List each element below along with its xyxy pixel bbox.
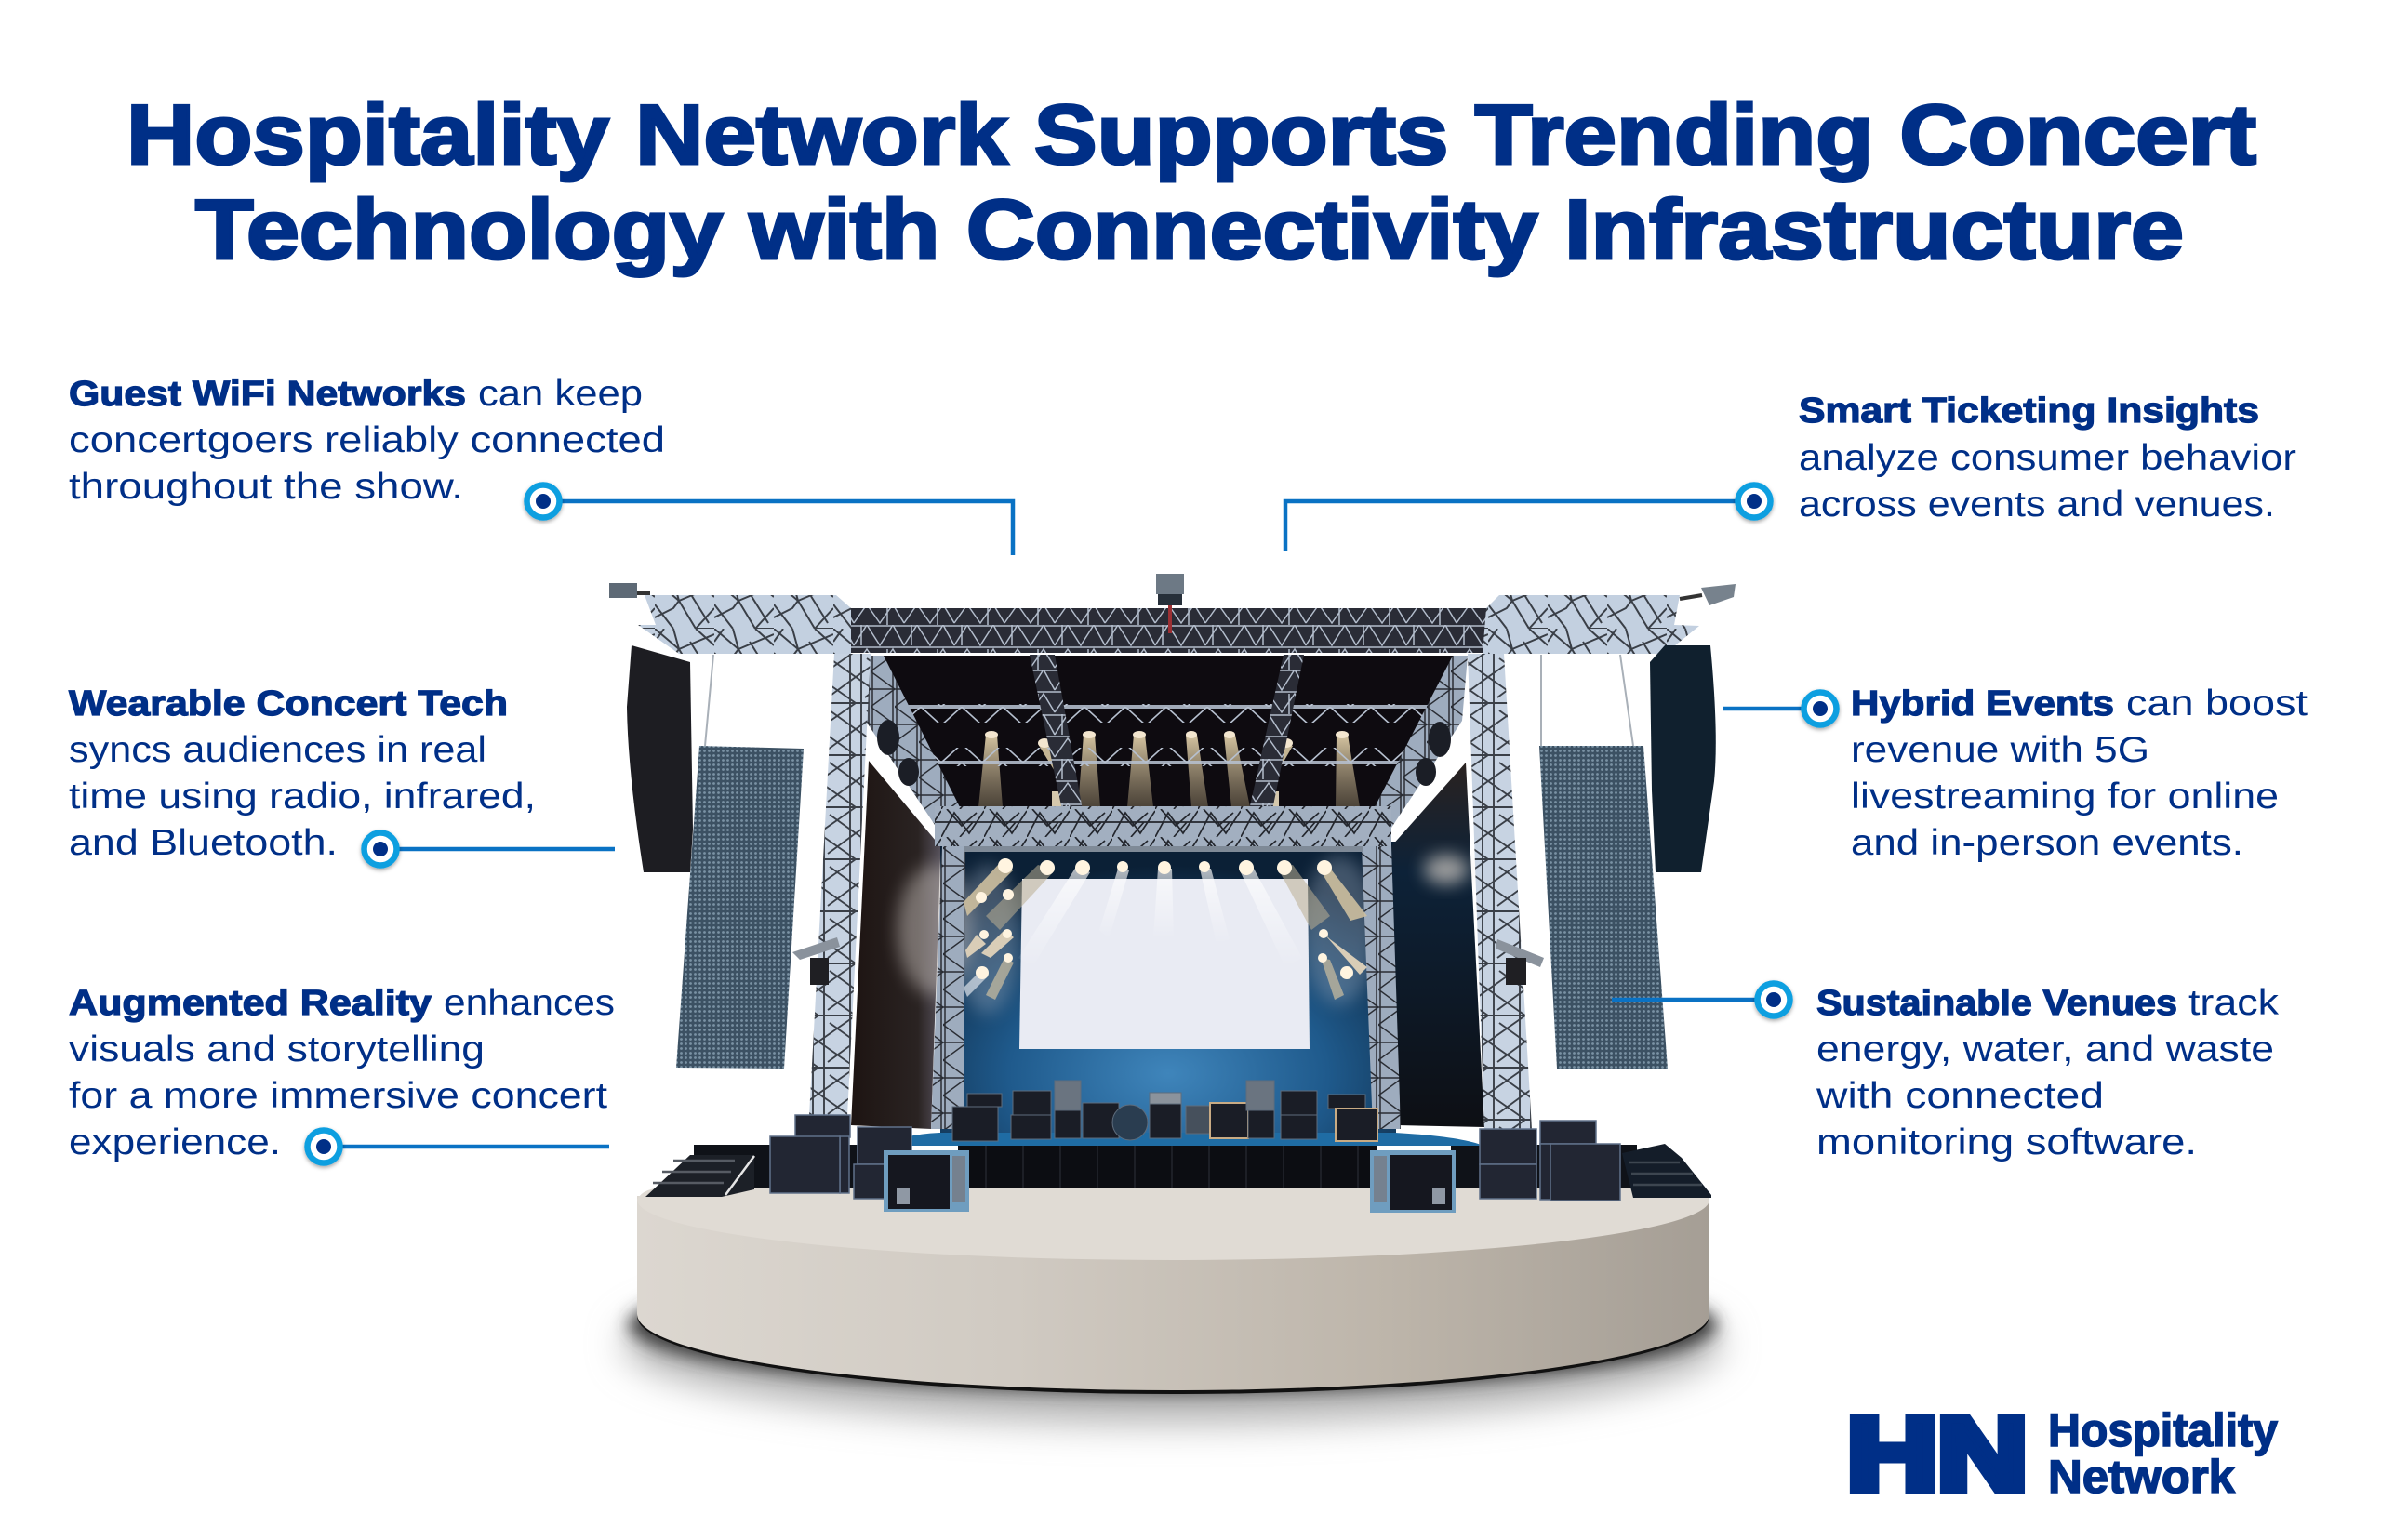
left stage monitor — [884, 1150, 969, 1212]
callout: Hybrid Events: Hybrid Events — [1851, 684, 2114, 724]
right side wall — [1391, 763, 1484, 1127]
lamp bar — [964, 846, 1363, 852]
back line amps — [952, 1081, 1377, 1141]
title: Hospitality Network Supports Trending Concert — [126, 88, 2256, 182]
connector: Wearable Concert Tech — [365, 833, 615, 865]
logo: Hospitality Network: HN — [1847, 1397, 2028, 1511]
callout: Wearable Concert Tech — [69, 684, 536, 863]
left line-array speaker — [627, 645, 693, 872]
glare on right wall — [1424, 855, 1469, 884]
main top truss — [848, 608, 1486, 653]
callout: Augmented Reality: for a more immersive concert — [69, 1076, 607, 1116]
logo: Hospitality Network — [1847, 1397, 2278, 1511]
stage base shadow — [624, 1258, 1722, 1423]
projection screen — [1019, 879, 1310, 1049]
title: Technology with Connectivity Infrastructure — [195, 183, 2184, 277]
logo: Hospitality Network: Network — [2048, 1451, 2235, 1503]
connector: Guest WiFi Networks — [526, 485, 1013, 555]
right upper truss — [1483, 595, 1699, 654]
callout: Augmented Reality: visuals and storytelling — [69, 1029, 485, 1069]
inner truss — [935, 806, 1391, 846]
callout: Hybrid Events: can boost — [2126, 684, 2308, 724]
side spot fixtures — [877, 720, 1451, 786]
hanging wires — [705, 655, 1633, 746]
callout: Wearable Concert Tech: and Bluetooth. — [69, 823, 338, 863]
beam lamps — [985, 731, 1349, 748]
callout: Wearable Concert Tech: time using radio, infrared, — [69, 777, 536, 816]
floodlights — [609, 574, 1736, 633]
callout: Sustainable Venues: with connected — [1816, 1076, 2104, 1116]
right line-array speaker — [1650, 645, 1716, 872]
callout: Augmented Reality — [69, 983, 615, 1162]
right LED panel — [1539, 746, 1668, 1069]
callout: Guest WiFi Networks: Guest WiFi Networks — [69, 375, 466, 414]
right speaker stacks — [1480, 1121, 1620, 1201]
right stage monitor — [1370, 1150, 1456, 1213]
callout: Wearable Concert Tech: syncs audiences in real — [69, 730, 486, 770]
callout: Guest WiFi Networks — [69, 374, 665, 507]
callout: Guest WiFi Networks: concertgoers reliably connected — [69, 420, 665, 460]
callout: Smart Ticketing Insights: Smart Ticketing Insights — [1799, 392, 2259, 431]
callout: Hybrid Events: and in-person events. — [1851, 823, 2243, 863]
logo: Hospitality Network: Hospitality — [2048, 1404, 2278, 1456]
callout: Smart Ticketing Insights — [1799, 392, 2296, 524]
circular stage base top — [637, 1188, 1709, 1260]
left speaker stacks — [770, 1115, 911, 1199]
stage curtain — [958, 1146, 1377, 1191]
callout: Sustainable Venues: track — [2188, 983, 2280, 1023]
connector: Sustainable Venues — [1612, 984, 1789, 1016]
callout: Augmented Reality: enhances — [444, 983, 615, 1023]
side stage platforms — [694, 1145, 1637, 1191]
callout: Smart Ticketing Insights: analyze consumer behavior — [1799, 438, 2296, 478]
haze beside screen — [898, 856, 1377, 1014]
callout: Augmented Reality: Augmented Reality — [69, 984, 432, 1023]
callout: Guest WiFi Networks: can keep — [478, 374, 643, 414]
callout: Hybrid Events — [1851, 684, 2308, 863]
diagonal side trusses — [867, 656, 1468, 833]
lower stage lights — [964, 858, 1367, 1000]
ceiling — [871, 656, 1466, 809]
callout: Wearable Concert Tech: Wearable Concert Tech — [69, 684, 508, 724]
upper stage light beams — [978, 735, 1360, 815]
ceiling cross trusses — [882, 704, 1462, 766]
back wall with glow — [940, 842, 1396, 1139]
callout: Sustainable Venues: monitoring software. — [1816, 1122, 2197, 1162]
left column camera — [792, 937, 840, 985]
left stairs — [645, 1155, 754, 1197]
callout: Sustainable Venues: Sustainable Venues — [1816, 984, 2177, 1023]
callout: Hybrid Events: revenue with 5G — [1851, 730, 2149, 770]
right column camera — [1496, 939, 1544, 985]
callout: Hybrid Events: livestreaming for online — [1851, 777, 2279, 816]
left main column — [809, 654, 871, 1116]
connector: Augmented Reality — [307, 1131, 609, 1162]
connector: Smart Ticketing Insights — [1285, 485, 1771, 551]
callout: Guest WiFi Networks: throughout the show. — [69, 467, 463, 507]
callout: Augmented Reality: experience. — [69, 1122, 281, 1162]
left side wall — [851, 761, 940, 1129]
callout: Sustainable Venues — [1816, 983, 2280, 1162]
right main column — [1468, 654, 1532, 1129]
callout: Sustainable Venues: energy, water, and waste — [1816, 1029, 2274, 1069]
left LED panel — [676, 746, 804, 1069]
vertical drop trusses — [1030, 655, 1304, 810]
title — [126, 88, 2256, 277]
right stairs — [1622, 1144, 1711, 1198]
circular stage base side — [637, 1198, 1709, 1394]
inner columns — [931, 846, 1401, 1129]
stage floor — [884, 1133, 1483, 1146]
connector: Hybrid Events — [1723, 692, 1836, 725]
callout: Smart Ticketing Insights: across events and venues. — [1799, 485, 2275, 524]
illustration: concert stage — [609, 574, 1736, 1423]
left upper truss — [638, 595, 851, 654]
